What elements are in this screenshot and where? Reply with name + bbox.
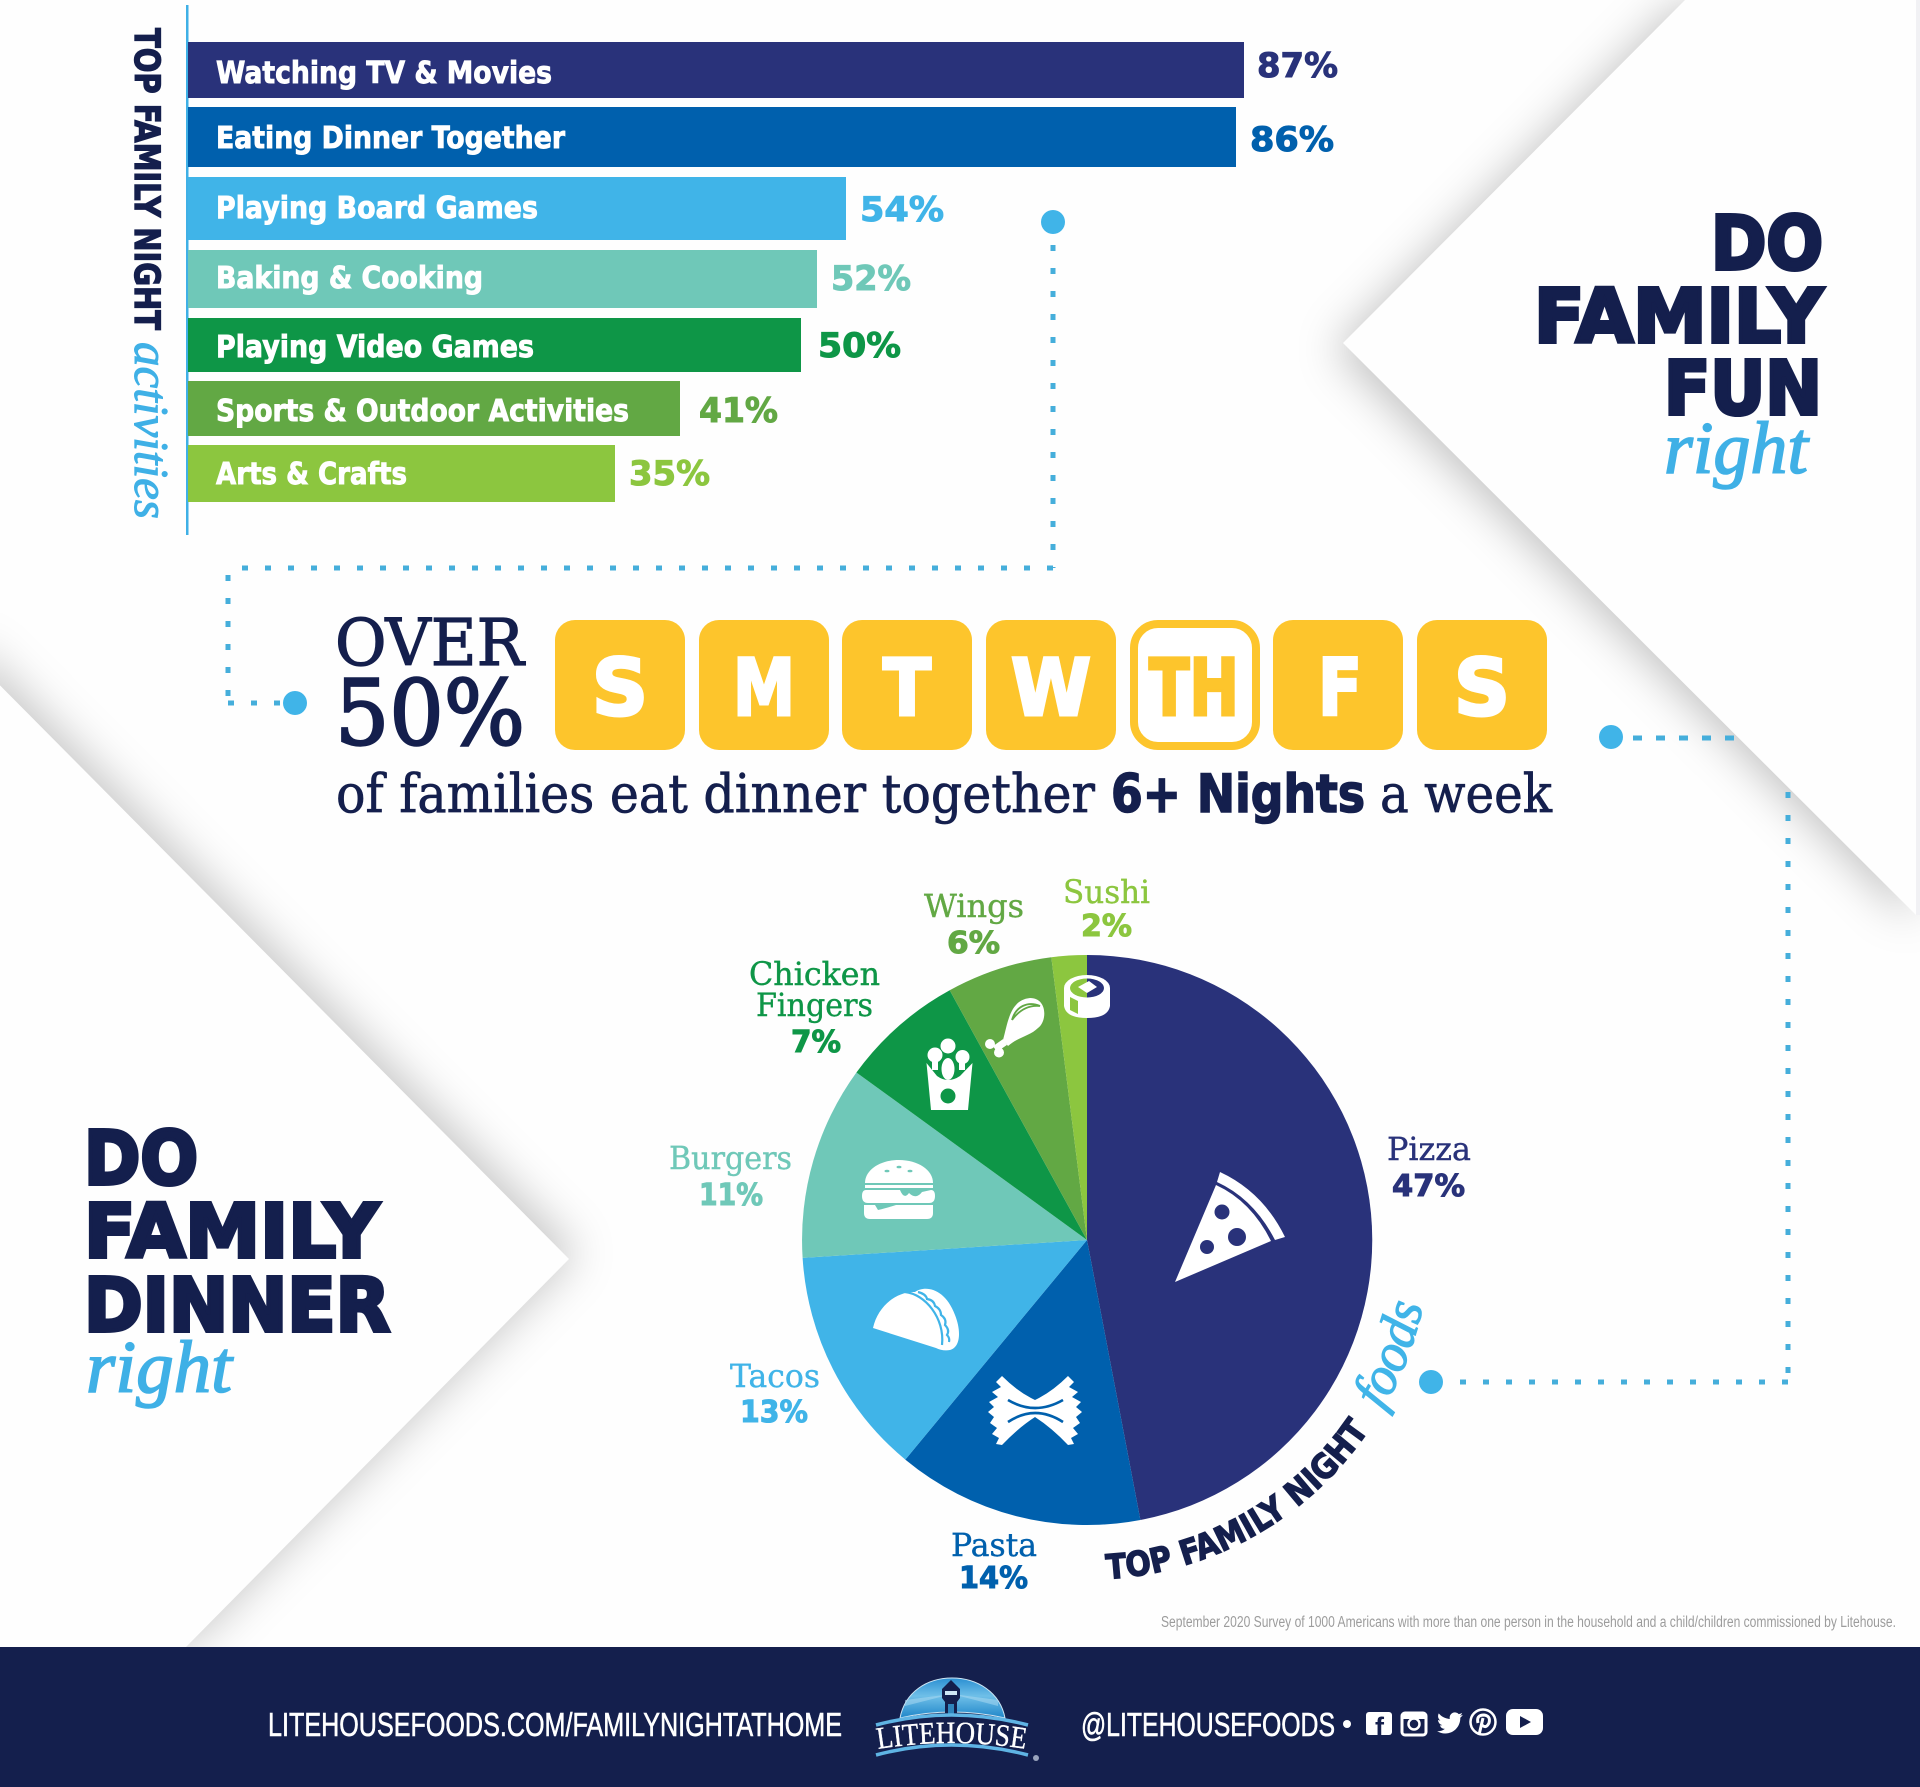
heading: do family dinner right: right (86, 1327, 234, 1409)
bar: watching TV and movies 87%: Watching TV & Movies (216, 56, 552, 91)
bar: eating dinner together 86% (188, 107, 1334, 167)
stat: over 50%: 50% (335, 661, 525, 766)
background chevron: right arrow with shadow (1335, 0, 1920, 921)
logo: litehouse: LITEHOUSE (876, 1722, 1026, 1749)
icon: pinterest (1470, 1710, 1496, 1735)
slice: pasta (905, 1240, 1140, 1525)
dotted connector: activities to dinner stat (228, 210, 1065, 715)
slice: sushi (1051, 955, 1087, 1240)
sentence: of families eat dinner together 6+ nights a week: a week (1380, 764, 1553, 825)
bar: sports and outdoor activities 41%: Sports & Outdoor Activities (216, 394, 629, 429)
label: pasta 14% (951, 1526, 1037, 1596)
label: chicken fingers 7%: Chicken (749, 955, 880, 993)
icon: taco (873, 1289, 959, 1350)
vertical heading: top family night activities: TOP FAMILY NIGHT (126, 28, 166, 330)
label: chicken fingers 7%: Fingers (756, 986, 873, 1024)
weekday tiles: F (1318, 644, 1362, 734)
bar: eating dinner together 86%: Eating Dinner Together (216, 121, 565, 156)
heading: do family dinner right: FAMILY (84, 1189, 380, 1275)
icon: pizza slice (1175, 1172, 1285, 1282)
weekday tiles: TH (1149, 644, 1239, 734)
bar: baking and cooking 52%: Baking & Cooking (216, 261, 483, 296)
icon: bow-tie pasta (988, 1376, 1082, 1445)
icon: sushi roll (1064, 975, 1110, 1018)
slice: burgers (802, 1072, 1087, 1258)
weekday tiles (555, 620, 1547, 750)
bar: sports and outdoor activities 41%: 41% (699, 391, 778, 431)
curved heading: top family night foods (1104, 1300, 1422, 1580)
pie chart: top family night foods (669, 873, 1471, 1596)
sentence: of families eat dinner together 6+ nights a week: of families eat dinner together (336, 764, 1096, 825)
heading: do family fun right: DO (1711, 201, 1823, 287)
weekday tiles: S (1454, 644, 1510, 734)
dotted connector: dinner stat to foods (1419, 725, 1788, 1394)
label: burgers 11% (669, 1139, 792, 1213)
icon: burger (862, 1160, 935, 1219)
heading: do family fun right: right (1664, 408, 1810, 490)
stat: over 50% (335, 606, 526, 766)
bar: playing board games 54%: Playing Board Games (216, 191, 538, 226)
heading: do family fun right: FUN (1664, 346, 1822, 432)
bar: eating dinner together 86%: 86% (1250, 120, 1334, 160)
icon: facebook (1366, 1712, 1392, 1742)
heading: do family fun right (1534, 201, 1824, 490)
slice: wings (950, 957, 1087, 1240)
label: sushi 2%: 2% (1081, 909, 1132, 944)
bar: playing board games 54% (188, 177, 944, 240)
weekday tiles: S (592, 644, 648, 734)
weekday tiles: M (733, 644, 795, 734)
label: pasta 14%: 14% (959, 1561, 1028, 1596)
vertical heading: top family night activities: activities (124, 342, 179, 519)
label: pasta 14%: Pasta (951, 1526, 1037, 1564)
label: pizza 47%: 47% (1392, 1169, 1465, 1204)
footer band (0, 1647, 1920, 1787)
icon: facebook: f (1375, 1712, 1385, 1742)
label: sushi 2% (1063, 873, 1150, 944)
label: burgers 11%: Burgers (669, 1139, 792, 1177)
label: pizza 47% (1387, 1130, 1471, 1204)
bar: watching TV and movies 87% (188, 42, 1338, 98)
weekday tiles: T (883, 644, 931, 734)
curved heading: top family night foods: foods (1355, 1300, 1422, 1417)
bar: playing video games 50% (188, 318, 901, 372)
label: wings 6% (924, 887, 1024, 961)
label: burgers 11%: 11% (699, 1178, 763, 1213)
label: wings 6%: 6% (947, 926, 1000, 961)
bar: playing video games 50%: 50% (818, 326, 901, 366)
axis line (186, 5, 188, 535)
heading: do family fun right: FAMILY (1534, 274, 1824, 360)
heading: do family dinner right: DINNER (84, 1263, 390, 1349)
footer link: website: LITEHOUSEFOODS.COM/FAMILYNIGHTATHOME (268, 1706, 842, 1743)
bar: arts and crafts 35% (188, 445, 710, 502)
label: pizza 47%: Pizza (1387, 1130, 1471, 1168)
vertical heading: top family night activities (124, 28, 179, 519)
heading: do family dinner right: DO (84, 1116, 198, 1202)
label: wings 6%: Wings (924, 887, 1024, 925)
sentence: of families eat dinner together 6+ nights a week (336, 764, 1553, 825)
label: chicken fingers 7%: 7% (791, 1025, 841, 1060)
panel: over 50% of families eat dinner together (335, 606, 1553, 825)
bar: playing video games 50%: Playing Video Games (216, 330, 534, 365)
stat: over 50%: OVER (335, 606, 526, 681)
bar: sports and outdoor activities 41% (188, 381, 778, 436)
label: tacos 13% (730, 1357, 820, 1430)
sentence: of families eat dinner together 6+ nights a week: 6+ Nights (1111, 764, 1365, 825)
label: tacos 13%: 13% (740, 1395, 808, 1430)
icon: twitter (1437, 1712, 1463, 1733)
weekday tiles: W (1011, 644, 1091, 734)
bar: baking and cooking 52% (188, 250, 911, 308)
slice: tacos (803, 1240, 1087, 1460)
icon: youtube (1506, 1709, 1543, 1735)
bar: watching TV and movies 87%: 87% (1257, 46, 1338, 86)
icon: chicken fingers box (926, 1038, 972, 1110)
icon: chicken wing drumstick (985, 998, 1044, 1058)
heading: do family dinner right (84, 1116, 390, 1409)
footer handle: litehousefoods: @LITEHOUSEFOODS (1081, 1706, 1335, 1743)
bar: playing board games 54%: 54% (860, 190, 944, 230)
background chevron: left arrow with shadow (0, 639, 577, 1694)
slice: pizza (1087, 955, 1372, 1520)
icon: instagram (1402, 1713, 1426, 1735)
label: sushi 2%: Sushi (1063, 873, 1150, 911)
curved heading: top family night foods: TOP FAMILY NIGHT (1104, 1415, 1366, 1580)
logo: litehouse (876, 1678, 1039, 1761)
slice: chicken fingers (856, 990, 1087, 1240)
bar: baking and cooking 52%: 52% (831, 259, 911, 299)
panel: top family night activities bar chart (124, 5, 1338, 535)
label: chicken fingers 7% (749, 955, 880, 1060)
label: tacos 13%: Tacos (730, 1357, 820, 1395)
bar: arts and crafts 35%: 35% (629, 454, 710, 494)
bar: arts and crafts 35%: Arts & Crafts (216, 457, 407, 492)
